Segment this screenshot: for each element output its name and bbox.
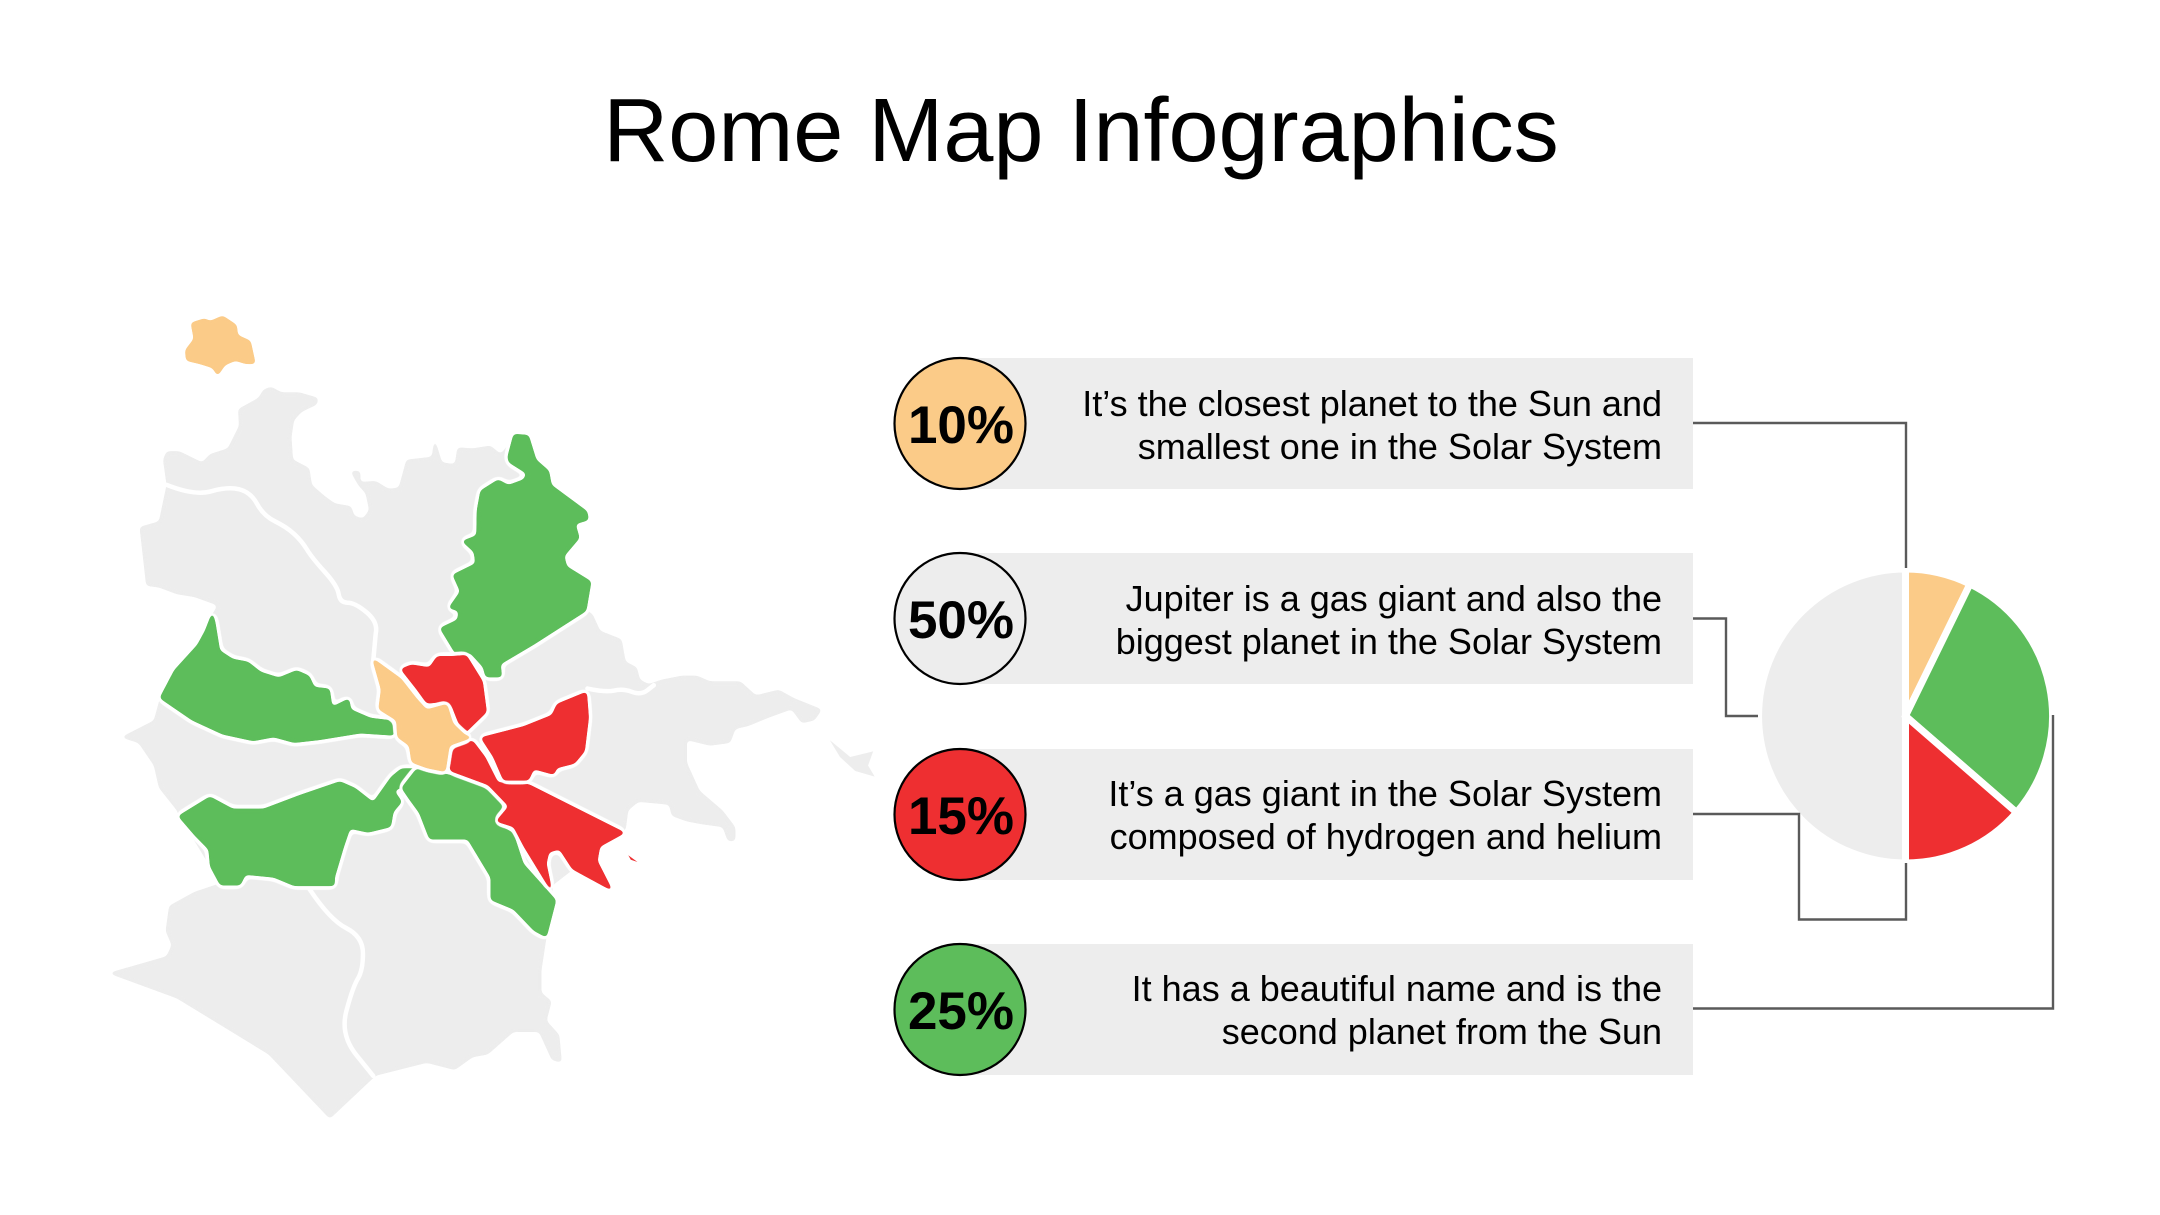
map of Rome [108, 315, 875, 1119]
slice: 50% gray [1759, 569, 1906, 863]
row 4: 25% [894, 944, 1693, 1075]
bar [960, 358, 1693, 489]
pie chart [1759, 569, 2053, 863]
row 3: 15% [894, 749, 1693, 880]
percentage: 15% [908, 787, 1014, 846]
row 2: 50% [894, 553, 1693, 684]
connector: row 4 to pie [1693, 715, 2053, 1008]
region: southeast red [450, 740, 626, 895]
description: biggest planet in the Solar System [1116, 621, 1662, 662]
connector: row 3 to pie [1693, 814, 1906, 920]
bar [960, 749, 1693, 880]
description: composed of hydrogen and helium [1110, 816, 1662, 857]
title: Rome Map Infographics [603, 81, 1559, 181]
slice: 25% green [1906, 584, 2053, 812]
bar [960, 553, 1693, 684]
slice: 10% orange [1906, 569, 1970, 716]
region: far east gray fragment [830, 740, 875, 777]
percentage: 10% [908, 396, 1014, 455]
percentage: 50% [908, 591, 1014, 650]
badge [894, 749, 1026, 880]
slice: 15% red [1906, 716, 2016, 863]
region: south green [401, 768, 556, 938]
description: It’s the closest planet to the Sun and [1082, 383, 1662, 424]
connector: row 2 to pie [1693, 618, 1758, 716]
description: It has a beautiful name and is the [1132, 968, 1662, 1009]
region: southwest green [178, 768, 417, 886]
region: red islet [628, 855, 637, 862]
row 1: 10% [894, 358, 1693, 489]
region: north island orange [185, 315, 256, 377]
region: center orange [372, 657, 474, 772]
description: second planet from the Sun [1222, 1011, 1662, 1052]
region: district borders [167, 485, 654, 1076]
region: east red [480, 691, 589, 781]
region: northeast green [439, 434, 592, 677]
badge [894, 944, 1026, 1075]
description: smallest one in the Solar System [1138, 426, 1662, 467]
connector: row 1 to pie [1693, 423, 1906, 568]
badge [894, 358, 1026, 489]
region: north center red [400, 655, 487, 733]
badge [894, 553, 1026, 684]
region: west green [159, 611, 395, 743]
percentage: 25% [908, 982, 1014, 1041]
description: Jupiter is a gas giant and also the [1126, 578, 1662, 619]
description: It’s a gas giant in the Solar System [1108, 773, 1662, 814]
region: gray base land [108, 387, 822, 1119]
bar [960, 944, 1693, 1075]
